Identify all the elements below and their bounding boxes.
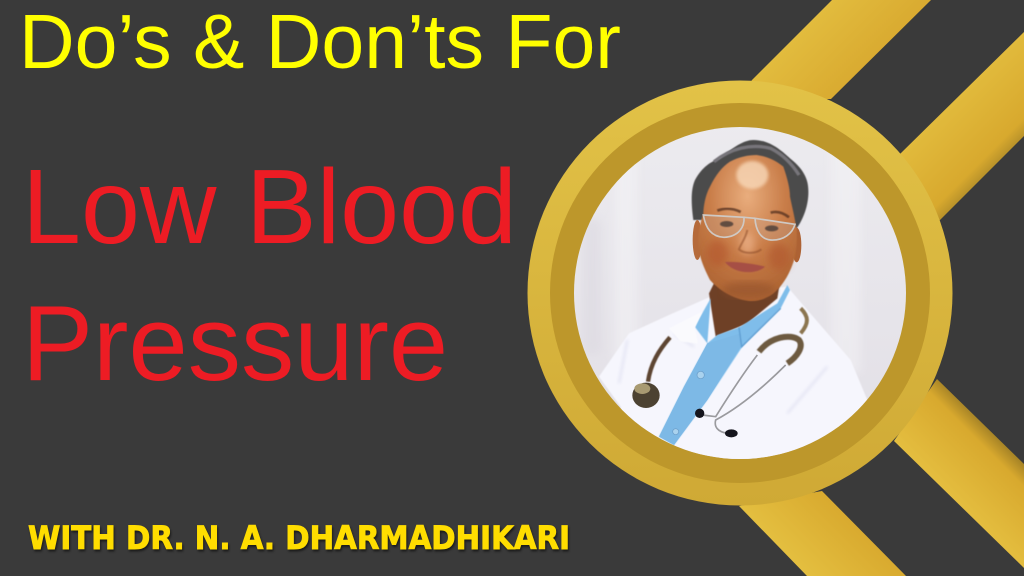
white coat — [599, 287, 874, 467]
backdrop folds — [584, 154, 863, 363]
shirt collar shadow — [739, 308, 781, 347]
diagonal band: upper right — [860, 32, 1024, 230]
mouth — [725, 262, 765, 272]
diagonal band: lower right — [894, 379, 1024, 568]
stethoscope tubing right — [759, 308, 807, 363]
stethoscope tubing left — [648, 337, 670, 382]
hair — [692, 140, 808, 228]
shirt buttons — [673, 371, 704, 435]
shirt body fill — [659, 343, 724, 445]
ear right — [794, 228, 802, 262]
forehead highlight — [736, 161, 768, 189]
neck — [709, 277, 781, 337]
face — [698, 155, 797, 301]
heading: low blood: Low Blood — [22, 148, 517, 266]
portrait medallion — [528, 80, 952, 506]
stethoscope binaurals — [702, 355, 786, 433]
presenter credit: WITH DR. N. A. DHARMADHIKARI — [28, 519, 570, 557]
ear left — [692, 220, 700, 260]
blue shirt — [659, 285, 790, 445]
eyebrows — [717, 209, 789, 217]
hair grey highlight — [714, 146, 799, 175]
diagonal band: lower left — [739, 491, 906, 576]
heading: pressure: Pressure — [22, 284, 448, 403]
coat shading — [618, 342, 826, 412]
outer gold ring — [528, 80, 952, 506]
nose — [739, 230, 761, 253]
photo backdrop — [570, 120, 910, 465]
glasses — [703, 215, 795, 240]
cheek tones — [707, 232, 790, 270]
portrait photo illustration — [570, 120, 910, 467]
stethoscope chest piece — [632, 383, 660, 408]
coat collar — [674, 312, 702, 342]
eyes — [720, 221, 778, 231]
heading: do's and don'ts: Do’s & Don’ts For — [19, 0, 621, 85]
stethoscope ear tips — [695, 409, 738, 437]
doctor figure — [584, 130, 874, 467]
inner gold ring — [550, 103, 930, 483]
diagonal band: upper left — [740, 0, 931, 99]
chin shadow — [722, 282, 776, 298]
